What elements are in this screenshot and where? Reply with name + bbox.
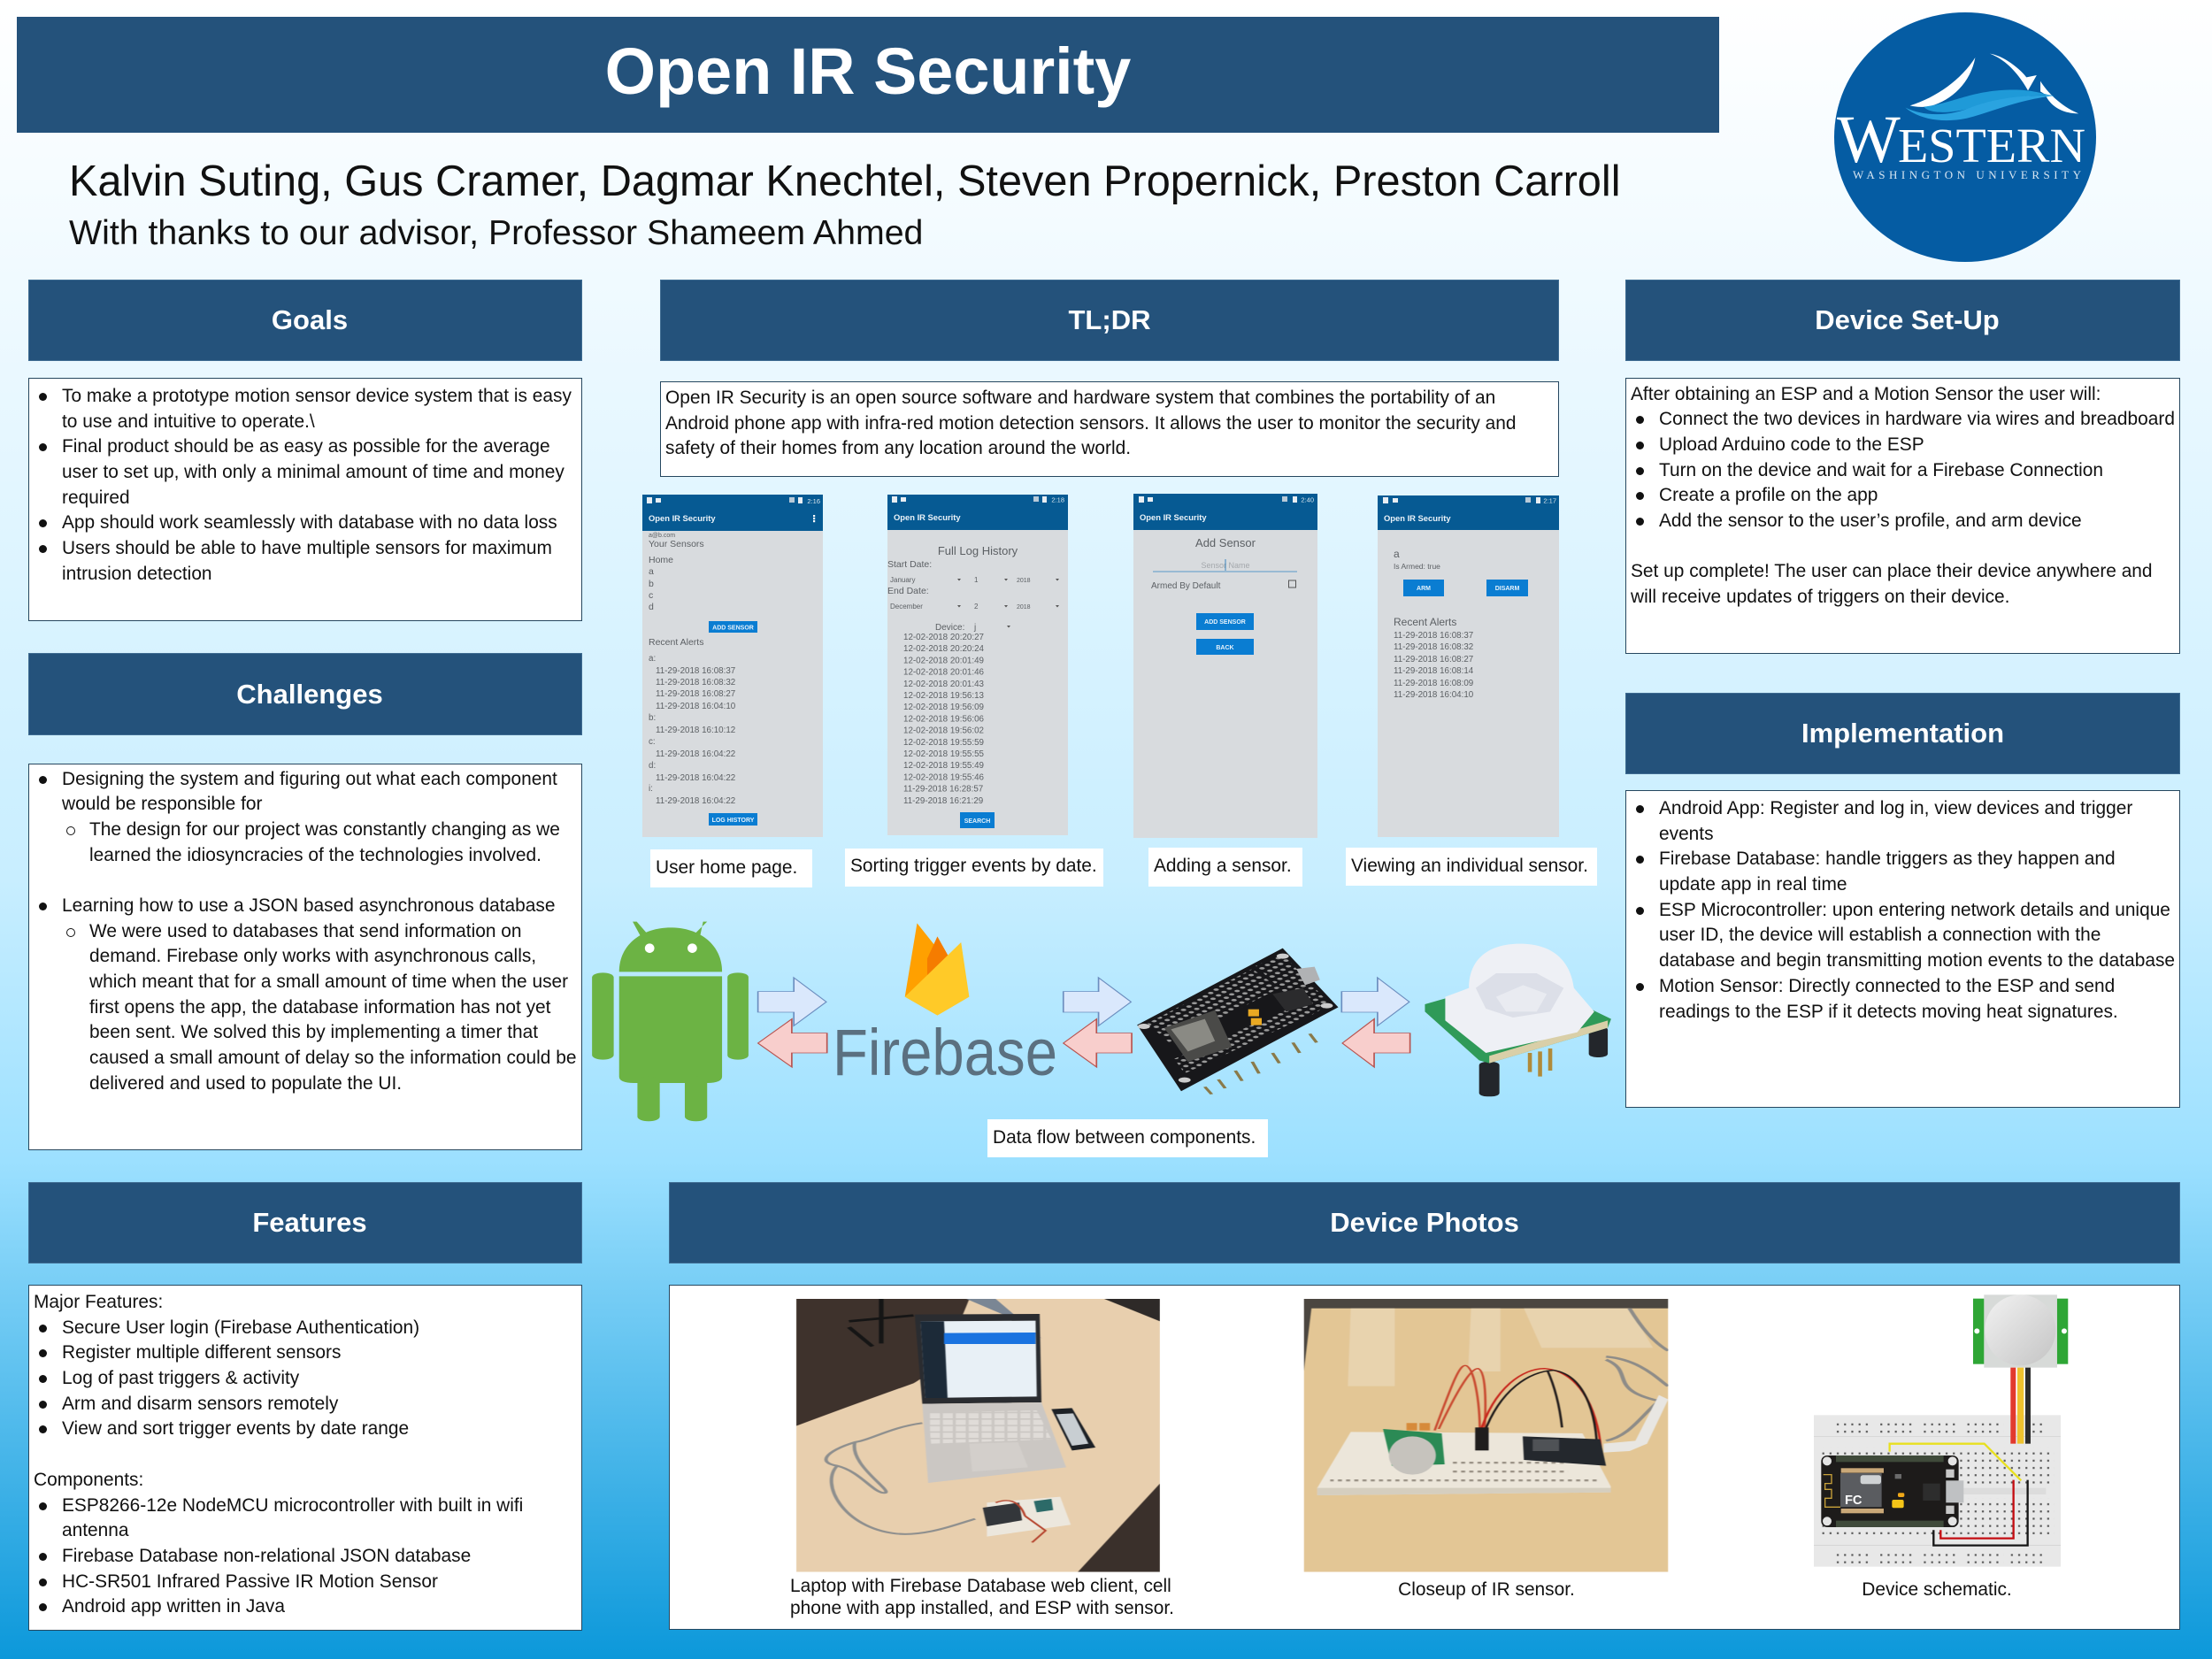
phone screenshot: log history: j [973, 623, 976, 633]
phone screenshot: user home page: b [649, 579, 654, 589]
phone screenshot: log history: 2018 [1017, 578, 1031, 584]
phone screenshot: log history: 12-02-2018 19:55:55 [903, 749, 985, 759]
caption: schematic: Device schematic. [1862, 1579, 2012, 1600]
heading: challenges [28, 653, 582, 735]
phone screenshot: user home page [642, 495, 823, 837]
phone screenshot: individual sensor: a [1394, 548, 1400, 560]
phone screenshot: add sensor: Open IR Security [1140, 512, 1207, 522]
phone screenshot: individual sensor: Recent Alerts [1394, 616, 1456, 628]
phone screenshot: log history: 12-02-2018 20:01:43 [903, 680, 985, 689]
title banner: Open IR Security [605, 34, 1131, 108]
caption: viewing a sensor [1346, 848, 1597, 886]
phone screenshot: user home page: LOG HISTORY [712, 818, 755, 824]
panel: device photos background [669, 1285, 2180, 1630]
icon: firebase flame [905, 923, 969, 1016]
phone screenshot: user home page: a: [649, 654, 656, 664]
heading: tl;dr [660, 280, 1559, 361]
phone screenshot: individual sensor [1378, 495, 1559, 837]
panel: goals: to use and intuitive to operate.\ [62, 411, 315, 432]
phone screenshot: user home page: b: [649, 713, 656, 723]
authors: Kalvin Suting, Gus Cramer, Dagmar Knechtel, Steven Propernick, Preston Carroll [69, 157, 1621, 205]
phone screenshot: log history: Open IR Security [894, 512, 961, 522]
panel: goals [28, 378, 582, 621]
caption: adding a sensor: Adding a sensor. [1154, 856, 1292, 876]
phone screenshot: log history: 11-29-2018 16:21:29 [903, 796, 983, 806]
panel: challenges: which meant that for a small amount of time when the user [89, 972, 568, 992]
panel: tl;dr: Open IR Security is an open source software and hardware system that combines the portability of an [665, 388, 1495, 408]
schematic: device wiring: FC [1845, 1494, 1863, 1508]
caption: sorting events [845, 849, 1103, 887]
heading: implementation [1625, 693, 2180, 774]
phone screenshot: user home page: 11-29-2018 16:08:32 [656, 678, 735, 687]
phone screenshot: log history: 2:18 [1051, 495, 1064, 504]
phone screenshot: log history: Full Log History [938, 544, 1018, 557]
caption: viewing a sensor: Viewing an individual sensor. [1351, 856, 1588, 876]
panel: device set-up: Set up complete! The user can place their device anywhere and [1631, 561, 2153, 581]
panel: goals: App should work seamlessly with database with no data loss [62, 512, 557, 533]
panel: features: Components: [34, 1470, 143, 1490]
caption: laptop photo: phone with app installed, and ESP with sensor. [790, 1598, 1174, 1618]
phone screenshot: log history: 2 [974, 603, 979, 611]
phone screenshot: log history: Start Date: [887, 559, 932, 570]
phone screenshot: log history: 12-02-2018 20:20:24 [903, 644, 985, 654]
panel: features: ESP8266-12e NodeMCU microcontroller with built in wifi [62, 1495, 523, 1515]
motion sensor module [1425, 944, 1611, 1096]
phone screenshot: user home page: a@b.com [649, 533, 675, 539]
phone screenshot: user home page: 11-29-2018 16:04:22 [656, 749, 735, 759]
panel: device set-up [1625, 378, 2180, 654]
panel: challenges: caused a small amount of delay so the information could be [89, 1048, 576, 1068]
phone screenshot: add sensor: ADD SENSOR [1204, 619, 1246, 626]
panel: implementation: database and begin transmitting motion events to the database [1659, 950, 2175, 971]
heading: device photos [669, 1182, 2180, 1263]
phone screenshot: log history: SEARCH [964, 818, 990, 825]
panel: device set-up: Create a profile on the app [1659, 485, 1878, 505]
arrows: esp to sensor [1341, 978, 1410, 1067]
panel: features: Secure User login (Firebase Authentication) [62, 1317, 419, 1338]
phone screenshot: log history: December [890, 603, 923, 611]
panel: goals: To make a prototype motion sensor device system that is easy [62, 386, 572, 406]
heading: tl;dr: TL;DR [1069, 304, 1150, 335]
logo: western washington university: ESTERN [1898, 119, 2085, 173]
panel: challenges: delivered and used to populate the UI. [89, 1073, 402, 1094]
esp microcontroller board [1137, 949, 1338, 1094]
phone screenshot: user home page: 11-29-2018 16:10:12 [656, 726, 735, 735]
phone screenshot: individual sensor: DISARM [1495, 586, 1519, 592]
panel: challenges [28, 764, 582, 1150]
phone screenshot: log history [887, 495, 1068, 835]
phone screenshot: individual sensor: 11-29-2018 16:08:32 [1394, 642, 1473, 652]
phone screenshot: log history: 11-29-2018 16:28:57 [903, 784, 983, 795]
phone screenshot: log history: 12-02-2018 20:01:49 [903, 657, 984, 665]
panel: tl;dr [660, 381, 1559, 477]
phone screenshot: individual sensor: Open IR Security [1384, 513, 1451, 523]
phone screenshot: individual sensor: 2:17 [1543, 497, 1556, 504]
phone screenshot: user home page: 11-29-2018 16:04:22 [656, 796, 735, 806]
panel: device set-up: Connect the two devices in hardware via wires and breadboard [1659, 409, 2175, 429]
graphics layer [592, 12, 2096, 1617]
phone screenshot: add sensor: Armed By Default [1151, 581, 1221, 591]
panel: device set-up: will receive updates of triggers on their device. [1631, 587, 2009, 607]
heading: goals [28, 280, 582, 361]
caption: user home page: User home page. [656, 857, 797, 878]
caption: data flow [987, 1119, 1268, 1157]
panel: challenges: learned the idiosyncracies of the technologies involved. [89, 845, 541, 865]
phone screenshot: user home page: Your Sensors [649, 539, 704, 549]
phone screenshot: add sensor: Sensor Name [1201, 561, 1250, 570]
panel: device set-up: Upload Arduino code to the ESP [1659, 434, 1924, 455]
panel: tl;dr: safety of their homes from any location around the world. [665, 438, 1131, 458]
phone screenshot: log history: End Date: [887, 586, 929, 596]
phone screenshot: individual sensor: ARM [1417, 586, 1431, 592]
phone screenshot: log history: January [890, 576, 915, 584]
caption: laptop photo: Laptop with Firebase Database web client, cell [790, 1576, 1171, 1596]
panel: implementation: update app in real time [1659, 874, 1847, 895]
phone screenshot: user home page: Recent Alerts [649, 637, 703, 648]
panel: device set-up: Turn on the device and wait for a Firebase Connection [1659, 460, 2103, 480]
phone screenshot: log history: 12-02-2018 19:56:02 [903, 726, 984, 736]
phone screenshot: user home page: 11-29-2018 16:04:10 [656, 702, 736, 711]
phone screenshot: add sensor: 2:40 [1301, 495, 1314, 504]
advisor thanks: With thanks to our advisor, Professor Shameem Ahmed [69, 213, 923, 252]
photo: closeup of ir sensor [1304, 1299, 1668, 1572]
panel: challenges: demand. Firebase only works with asynchronous calls, [89, 946, 536, 966]
panel: implementation: readings to the ESP if it detects moving heat signatures. [1659, 1002, 2118, 1021]
heading: device set-up [1625, 280, 2180, 361]
panel: device set-up: Add the sensor to the user’s profile, and arm device [1659, 511, 2082, 531]
panel: features: Log of past triggers & activity [62, 1368, 299, 1388]
phone screenshot: log history: 2018 [1017, 604, 1031, 611]
phone screenshot: individual sensor: 11-29-2018 16:04:10 [1394, 690, 1474, 700]
panel: implementation: user ID, the device will establish a connection with the [1659, 925, 2101, 945]
panel: tl;dr: Android phone app with infra-red motion detection sensors. It allows the user to monitor the security and [665, 413, 1517, 434]
logo: western washington university [1834, 12, 2096, 262]
phone screenshot: log history: 12-02-2018 19:56:13 [903, 691, 985, 701]
panel: device set-up: After obtaining an ESP and a Motion Sensor the user will: [1631, 384, 2101, 403]
panel: features: Major Features: [34, 1292, 163, 1312]
phone screenshot: user home page: d [649, 602, 654, 612]
phone screenshot: log history: Device: [935, 623, 964, 633]
phone screenshot: log history: 12-02-2018 19:56:09 [903, 703, 984, 712]
panel: features: antenna [62, 1520, 129, 1540]
caption: closeup: Closeup of IR sensor. [1398, 1579, 1575, 1600]
phone screenshot: user home page: d: [649, 761, 656, 771]
heading: device photos: Device Photos [1330, 1207, 1519, 1238]
phone screenshot: individual sensor: 11-29-2018 16:08:27 [1394, 655, 1473, 664]
panel: goals: Users should be able to have multiple sensors for maximum [62, 538, 552, 558]
panel: features: Firebase Database non-relational JSON database [62, 1546, 471, 1566]
arrows: android to firebase [758, 978, 827, 1067]
phone screenshot: log history: 12-02-2018 19:56:06 [903, 715, 985, 724]
phone screenshot: individual sensor: 11-29-2018 16:08:09 [1394, 679, 1473, 688]
phone screenshot: user home page: c [649, 590, 653, 601]
phone screenshot: log history: 1 [974, 576, 979, 584]
phone screenshot: user home page: a [649, 566, 654, 577]
panel: implementation: Motion Sensor: Directly connected to the ESP and send [1659, 976, 2115, 996]
caption: laptop photo [790, 1576, 1174, 1618]
panel: goals: required [62, 488, 130, 508]
panel: implementation: Firebase Database: handle triggers as they happen and [1659, 849, 2116, 869]
heading: implementation: Implementation [1801, 718, 2004, 749]
icon: android robot [592, 922, 749, 1121]
phone screenshot: user home page: Open IR Security [649, 513, 716, 523]
heading: features: Features [252, 1207, 367, 1238]
panel: challenges: Learning how to use a JSON based asynchronous database [62, 895, 555, 916]
caption: data flow: Data flow between components. [993, 1127, 1256, 1148]
caption: sorting events: Sorting trigger events by date. [850, 856, 1097, 876]
logo: western washington university: WASHINGTON UNIVERSITY [1853, 168, 2082, 181]
panel: implementation: events [1659, 824, 1714, 844]
heading: device set-up: Device Set-Up [1815, 304, 2000, 335]
panel: implementation: Android App: Register and log in, view devices and trigger [1659, 798, 2132, 818]
panel: challenges: Designing the system and figuring out what each component [62, 768, 557, 789]
heading: goals: Goals [272, 304, 348, 335]
phone screenshot: add sensor: BACK [1216, 645, 1234, 651]
photo: laptop, phone and esp on table [796, 1299, 1160, 1572]
heading: challenges: Challenges [236, 678, 383, 710]
panel: challenges: We were used to databases that send information on [89, 921, 522, 941]
phone screenshot: add sensor [1133, 494, 1317, 838]
panel: implementation [1625, 790, 2180, 1108]
caption: adding a sensor [1148, 848, 1302, 887]
schematic: device wiring [1814, 1294, 2068, 1567]
panel: challenges: been sent. We solved this by implementing a timer that [89, 1022, 538, 1042]
panel: features: Register multiple different sensors [62, 1342, 341, 1363]
panel: features: View and sort trigger events by date range [62, 1418, 409, 1439]
phone screenshot: log history: 12-02-2018 19:55:46 [903, 773, 985, 782]
phone screenshot: individual sensor: 11-29-2018 16:08:37 [1394, 631, 1473, 641]
panel: goals: intrusion detection [62, 564, 212, 584]
panel: goals: Final product should be as easy as possible for the average [62, 436, 550, 457]
phone screenshot: add sensor: Add Sensor [1195, 536, 1256, 549]
panel: challenges: The design for our project was constantly changing as we [89, 819, 560, 840]
logo: western washington university: W [1837, 103, 1901, 177]
phone screenshot: log history: 12-02-2018 20:20:27 [903, 633, 984, 642]
panel: features: HC-SR501 Infrared Passive IR Motion Sensor [62, 1571, 438, 1592]
panel: features: Arm and disarm sensors remotely [62, 1394, 338, 1414]
phone screenshot: user home page: 11-29-2018 16:08:37 [656, 666, 735, 676]
phone screenshot: user home page: c: [649, 737, 656, 747]
phone screenshot: user home page: ADD SENSOR [712, 625, 754, 632]
title banner [17, 17, 1719, 133]
panel: implementation: ESP Microcontroller: upon entering network details and unique [1659, 900, 2170, 920]
phone screenshot: user home page: Home [649, 555, 673, 565]
phone screenshot: log history: 12-02-2018 19:55:49 [903, 761, 984, 771]
arrows: firebase to esp [1064, 978, 1132, 1067]
phone screenshot: individual sensor: Is Armed: true [1394, 562, 1440, 571]
firebase wordmark: Firebase [833, 1016, 1057, 1089]
phone screenshot: user home page: i: [649, 784, 653, 794]
panel: challenges: first opens the app, the database information has not yet [89, 997, 550, 1018]
phone screenshot: log history: 12-02-2018 20:01:46 [903, 667, 985, 678]
phone screenshot: user home page: 11-29-2018 16:08:27 [656, 689, 735, 699]
heading: features [28, 1182, 582, 1263]
panel: features: Android app written in Java [62, 1596, 285, 1617]
panel: features [28, 1285, 582, 1631]
phone screenshot: log history: 12-02-2018 19:55:59 [903, 738, 984, 748]
phone screenshot: user home page: 2:16 [807, 497, 820, 505]
caption: user home page [650, 849, 812, 887]
panel: goals: user to set up, with only a minimal amount of time and money [62, 462, 565, 482]
phone screenshot: user home page: 11-29-2018 16:04:22 [656, 773, 735, 783]
phone screenshot: individual sensor: 11-29-2018 16:08:14 [1394, 666, 1474, 676]
panel: challenges: would be responsible for [62, 794, 262, 814]
